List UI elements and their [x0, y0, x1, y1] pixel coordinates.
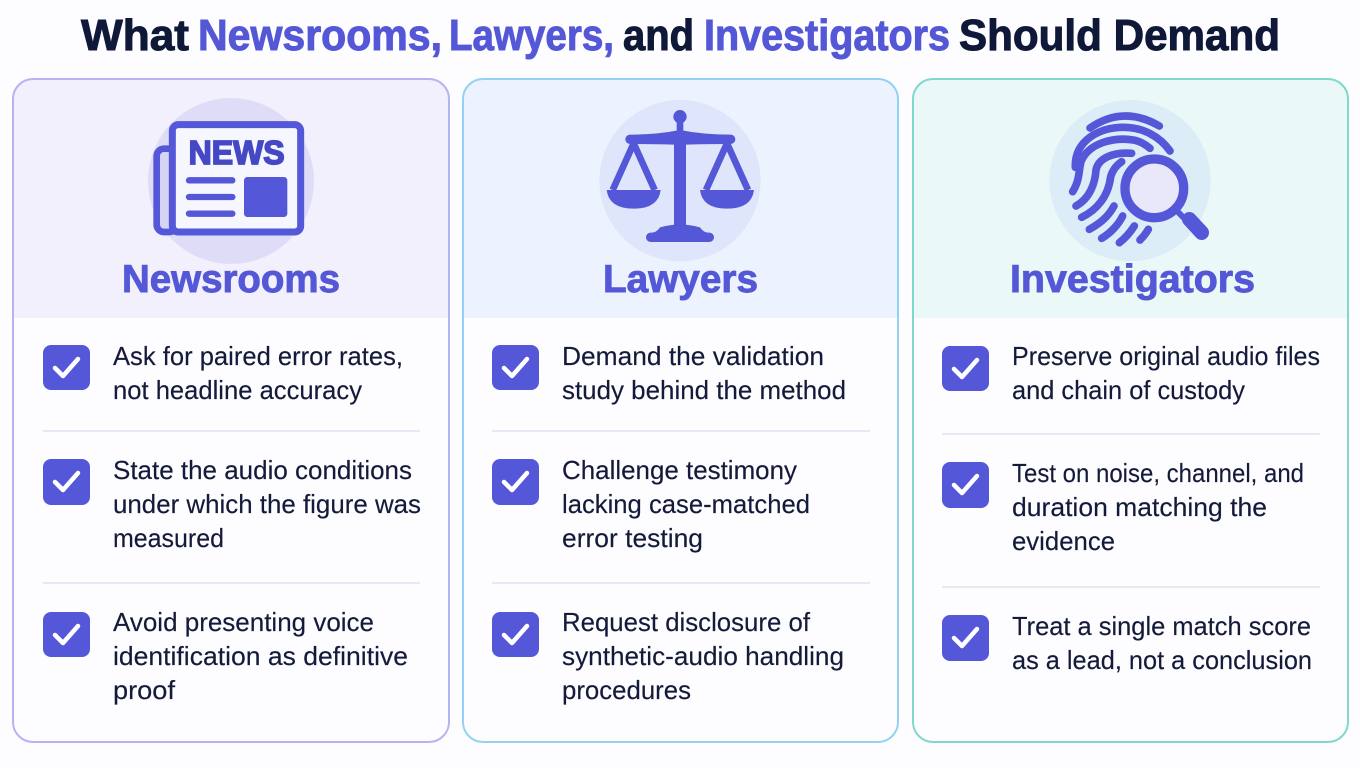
item: validation study	[492, 341, 846, 405]
item: matched testing: Test on noise, channel, and	[1012, 458, 1304, 488]
title: Investigators	[704, 11, 950, 60]
item: audio conditions	[43, 455, 421, 553]
title: What	[81, 11, 189, 60]
item: matched testing: evidence	[1012, 526, 1115, 556]
item: synthetic-audio disclosure: Request disclosure of	[562, 607, 811, 637]
item: audio conditions: State the audio conditions	[113, 455, 412, 485]
item: synthetic-audio disclosure: synthetic-audio handling	[562, 641, 844, 671]
item: chain of custody: and chain of custody	[1012, 375, 1245, 405]
panel: Lawyers	[463, 79, 898, 742]
item: match score as lead	[942, 611, 1312, 675]
item: definitive proof	[43, 607, 408, 705]
item: validation study: Demand the validation	[562, 341, 824, 371]
item: challenge testimony	[492, 455, 810, 553]
icon: scales of justice	[599, 100, 761, 261]
item: paired error rates: Ask for paired error rates,	[113, 341, 403, 371]
heading: Investigators: Investigators	[1010, 258, 1255, 301]
icon: newspaper: NEWS	[189, 135, 285, 172]
item: audio conditions: under which the figure was	[113, 489, 421, 519]
heading: Newsrooms: Newsrooms	[122, 258, 340, 301]
item: challenge testimony: Challenge testimony	[562, 455, 797, 485]
title: and	[623, 11, 694, 60]
item: match score as lead: as a lead, not a conclusion	[1012, 645, 1312, 675]
icon: fingerprint and magnifier	[1049, 100, 1211, 261]
item: paired error rates	[43, 341, 403, 405]
panel: Investigators	[913, 79, 1348, 742]
title: Newsrooms,	[198, 11, 442, 60]
title	[81, 11, 1280, 60]
title: Should Demand	[959, 11, 1280, 60]
item: audio conditions: measured	[113, 523, 224, 553]
title: Lawyers,	[449, 11, 614, 60]
item: chain of custody	[942, 341, 1320, 405]
item: synthetic-audio disclosure: procedures	[562, 675, 691, 705]
item: paired error rates: not headline accuracy	[113, 375, 362, 405]
item: matched testing: duration matching the	[1012, 492, 1267, 522]
item: validation study: study behind the method	[562, 375, 846, 405]
heading: Lawyers: Lawyers	[603, 258, 758, 301]
item: chain of custody: Preserve original audio files	[1012, 341, 1320, 371]
item: definitive proof: Avoid presenting voice	[113, 607, 374, 637]
item: challenge testimony: lacking case-matched	[562, 489, 810, 519]
item: synthetic-audio disclosure	[492, 607, 844, 705]
icon: newspaper	[148, 98, 314, 264]
item: challenge testimony: error testing	[562, 523, 703, 553]
item: definitive proof: proof	[113, 675, 176, 705]
item: match score as lead: Treat a single match score	[1012, 611, 1311, 641]
item: matched testing	[942, 458, 1304, 556]
panel: Newsrooms	[13, 79, 449, 742]
item: definitive proof: identification as definitive	[113, 641, 408, 671]
